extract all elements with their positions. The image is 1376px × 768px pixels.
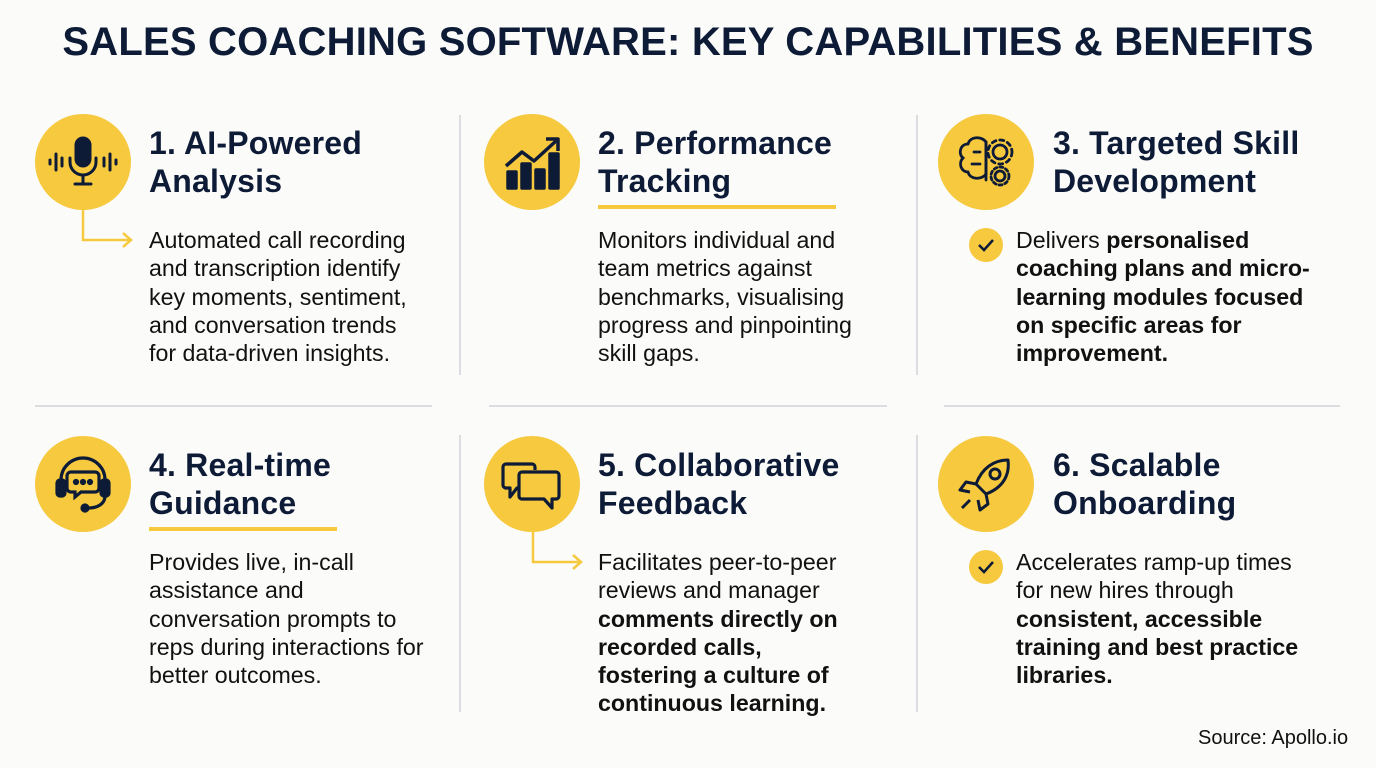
heading [1053, 125, 1299, 199]
text: and conversation trends [149, 312, 396, 338]
heading: Onboarding [1053, 485, 1236, 521]
heading [598, 125, 832, 199]
text: Monitors individual and [598, 227, 835, 253]
icon: check [969, 550, 1003, 584]
icon: chart [484, 114, 580, 210]
text: progress and pinpointing [598, 312, 852, 338]
heading: Guidance [149, 485, 296, 521]
icon: headset [35, 436, 131, 532]
heading: 2. Performance [598, 125, 832, 161]
text: fostering a culture of [598, 662, 829, 688]
text [1016, 227, 1310, 366]
text: recorded calls, [598, 634, 762, 660]
text [149, 227, 407, 366]
heading: 3. Targeted Skill [1053, 125, 1299, 161]
panel: Real-time Guidance [35, 436, 424, 688]
heading: 1. AI-Powered [149, 125, 362, 161]
text: reviews and manager [598, 577, 820, 603]
underline [149, 527, 337, 531]
text [149, 549, 424, 688]
text: Automated call recording [149, 227, 406, 253]
text [1016, 549, 1298, 688]
icon: brain gear [938, 114, 1034, 210]
heading: Development [1053, 163, 1256, 199]
icon: rocket [938, 436, 1034, 532]
text: consistent, accessible [1016, 606, 1262, 632]
panel: Collaborative Feedback [484, 436, 840, 716]
heading: 6. Scalable [1053, 447, 1221, 483]
text: and transcription identify [149, 255, 400, 281]
text: Provides live, in-call [149, 549, 354, 575]
icon: check [969, 228, 1003, 262]
underline [598, 205, 836, 209]
text: conversation prompts to [149, 606, 396, 632]
panel: Scalable Onboarding [938, 436, 1298, 688]
text: benchmarks, visualising [598, 284, 844, 310]
text: training and best practice [1016, 634, 1298, 660]
text [598, 227, 852, 366]
text: for new hires through [1016, 577, 1234, 603]
heading [149, 447, 331, 521]
heading: 5. Collaborative [598, 447, 840, 483]
text: team metrics against [598, 255, 812, 281]
text: improvement. [1016, 340, 1168, 366]
heading: Feedback [598, 485, 747, 521]
heading [149, 125, 362, 199]
text: libraries. [1016, 662, 1113, 688]
text: better outcomes. [149, 662, 322, 688]
panel: Performance Tracking [484, 114, 852, 366]
text: comments directly on [598, 606, 838, 632]
heading: Analysis [149, 163, 282, 199]
text: key moments, sentiment, [149, 284, 407, 310]
text: on specific areas for [1016, 312, 1242, 338]
text: assistance and [149, 577, 304, 603]
text: reps during interactions for [149, 634, 424, 660]
arrow [82, 210, 133, 248]
heading: Tracking [598, 163, 731, 199]
text: Delivers personalised [1016, 227, 1249, 253]
text: learning modules focused [1016, 284, 1303, 310]
text: continuous learning. [598, 690, 826, 716]
text: for data-driven insights. [149, 340, 390, 366]
text [598, 549, 838, 716]
icon: chat bubbles [484, 436, 580, 532]
source: Source: Apollo.io [1198, 727, 1348, 749]
panel: AI-Powered Analysis [35, 114, 407, 366]
heading [1053, 447, 1236, 521]
arrow [532, 532, 583, 570]
text: Accelerates ramp-up times [1016, 549, 1292, 575]
heading: 4. Real-time [149, 447, 331, 483]
icon: microphone [35, 114, 131, 210]
text: skill gaps. [598, 340, 700, 366]
text: Facilitates peer-to-peer [598, 549, 836, 575]
panel: Targeted Skill Development [938, 114, 1310, 366]
title: SALES COACHING SOFTWARE: KEY CAPABILITIES & BENEFITS [62, 20, 1314, 64]
heading [598, 447, 840, 521]
text: coaching plans and micro- [1016, 255, 1310, 281]
